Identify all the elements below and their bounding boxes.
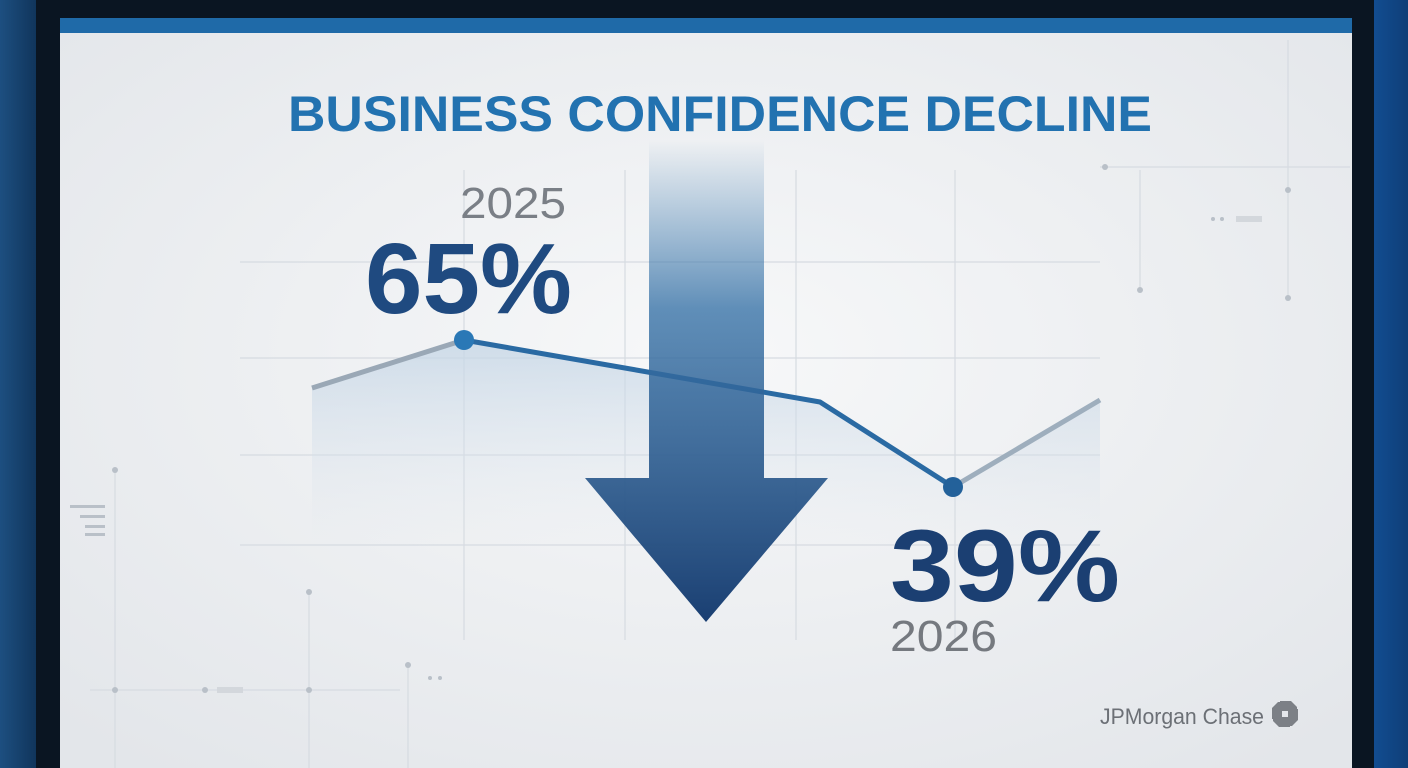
title: BUSINESS CONFIDENCE DECLINE <box>288 86 1152 142</box>
label 2025: 2025 <box>460 179 566 228</box>
background wall <box>0 0 40 768</box>
label 2025: 65% <box>365 223 572 335</box>
chart: line with area <box>312 330 1100 545</box>
label 2026 <box>890 509 1120 661</box>
logo: JPMorgan Chase: JPMorgan Chase <box>1100 704 1264 729</box>
label 2026: 39% <box>890 509 1120 623</box>
arrow: down <box>585 140 828 622</box>
top bar <box>60 18 1352 33</box>
label 2025 <box>365 179 572 335</box>
label 2026: 2026 <box>890 612 997 661</box>
